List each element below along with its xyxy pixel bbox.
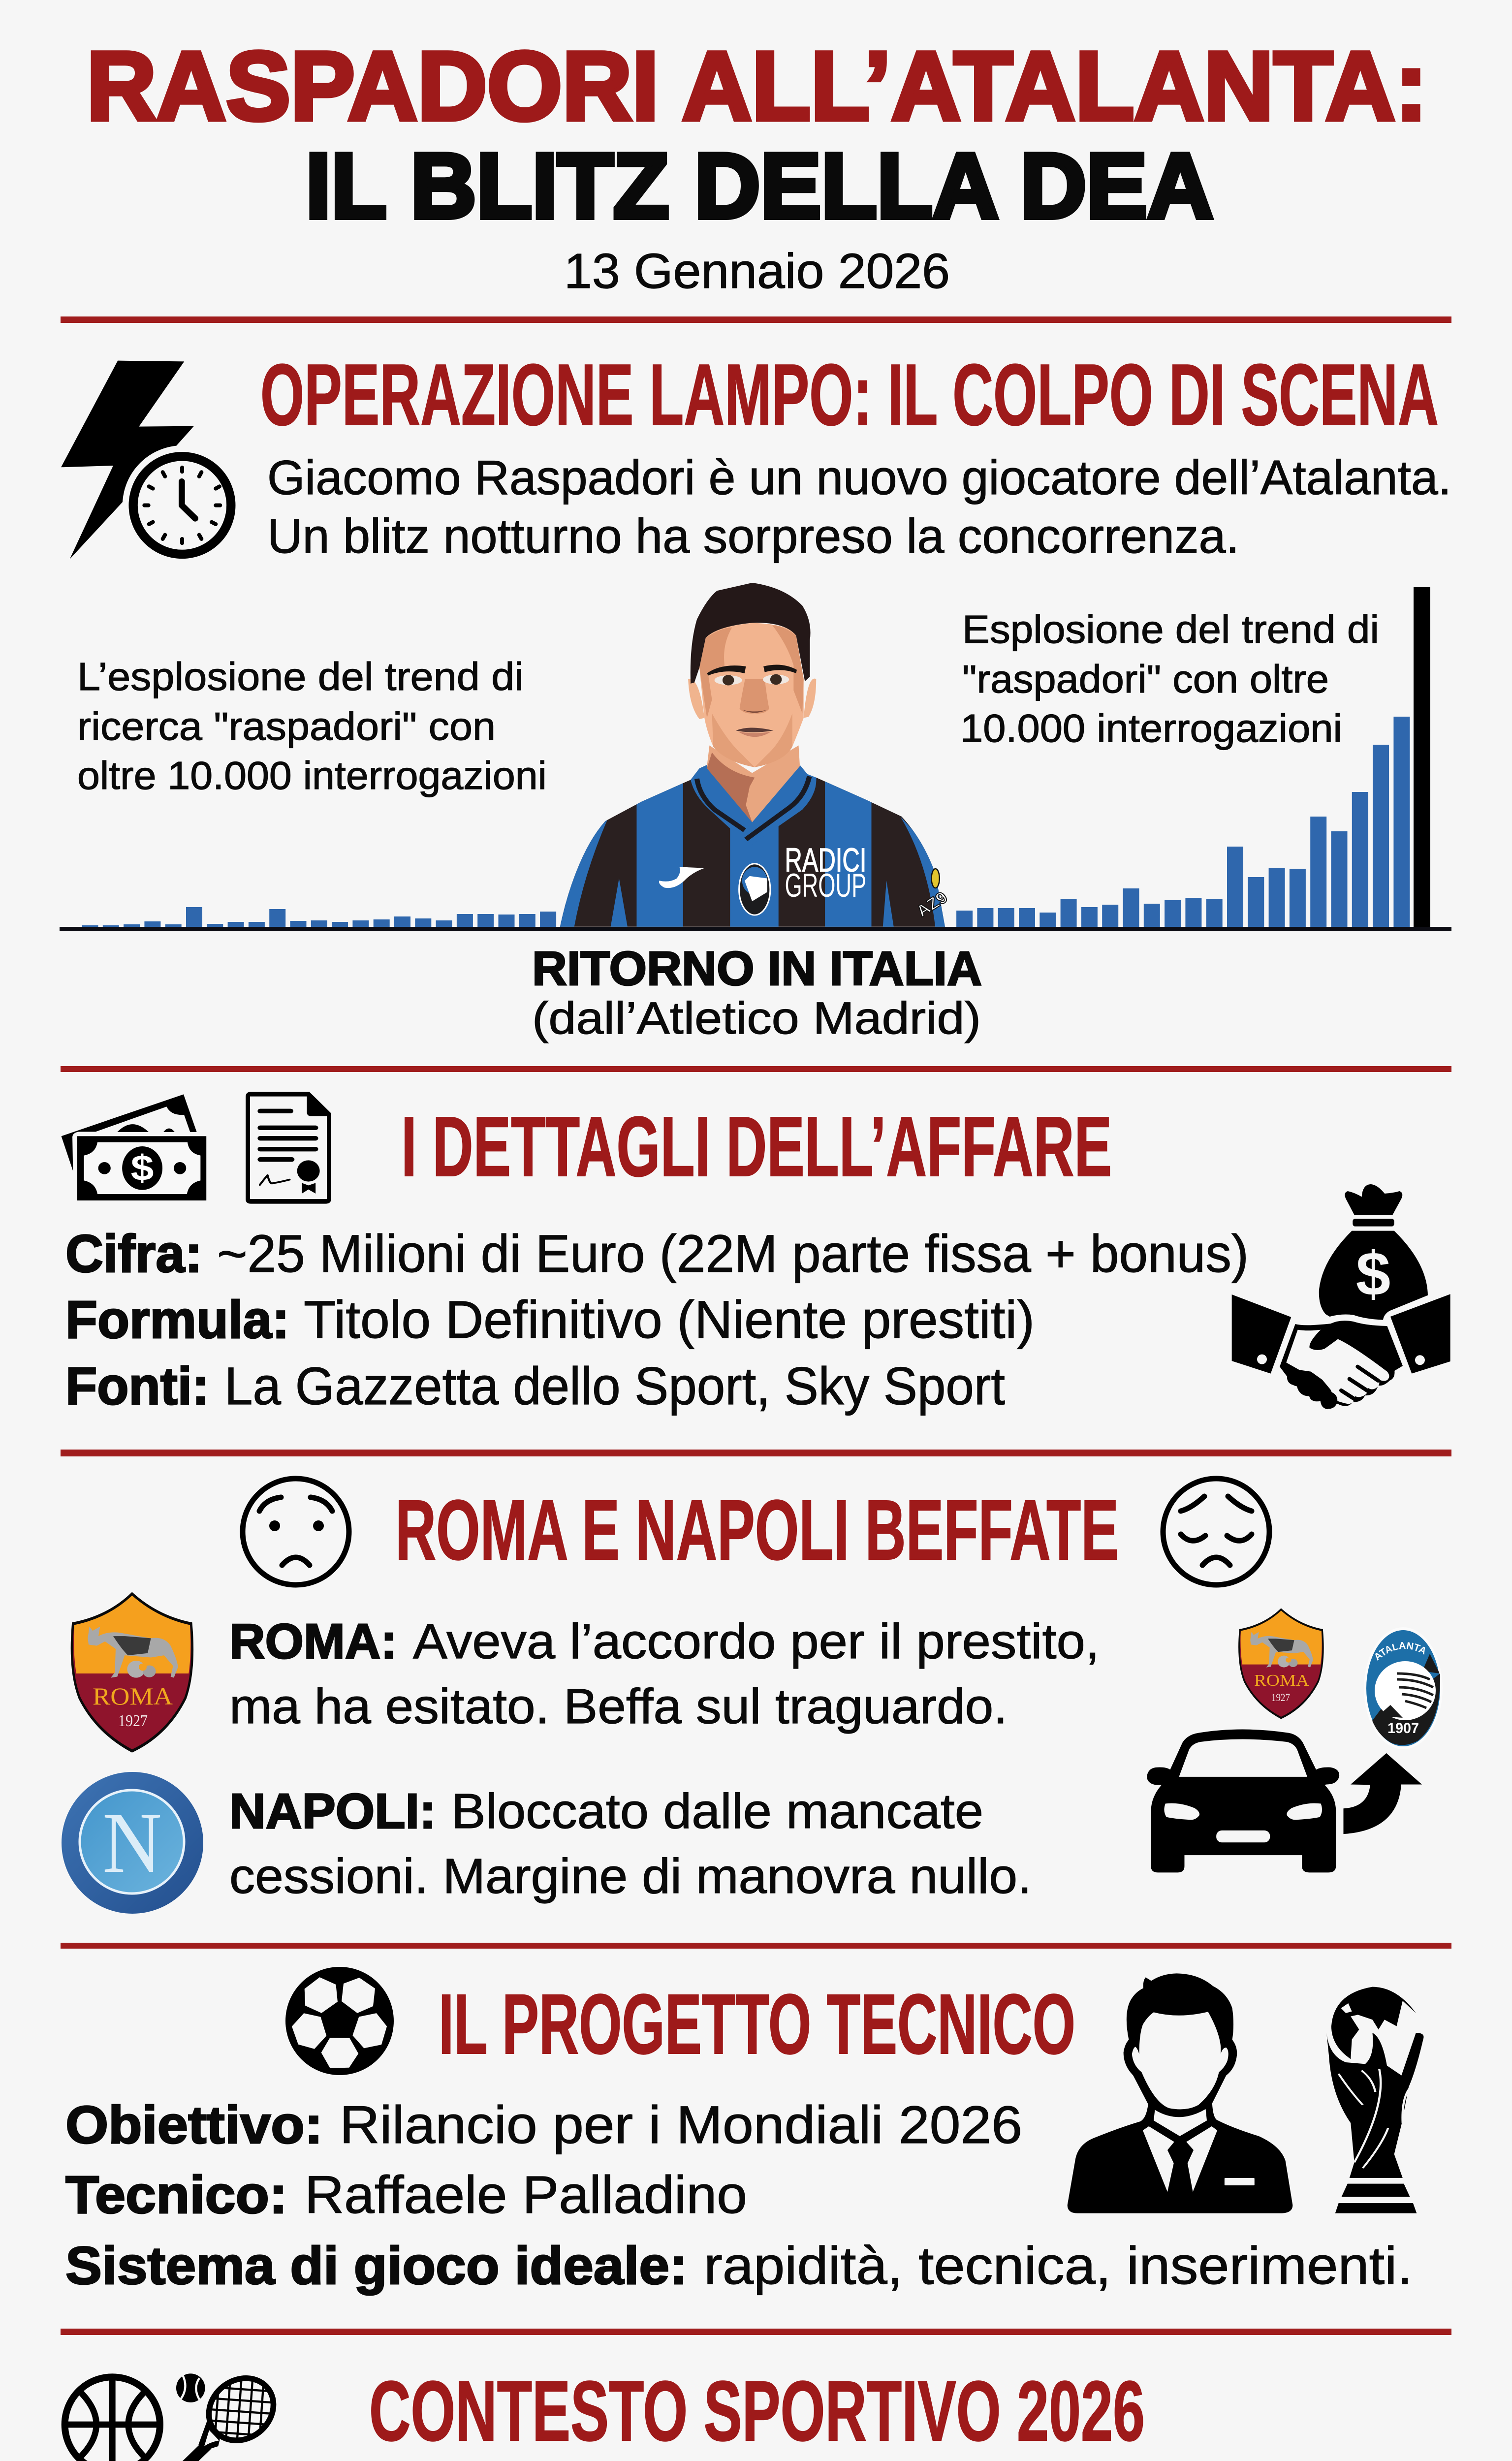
logo: AS Roma shield: ROMA [93, 1682, 173, 1710]
panel: contesto sportivo [62, 2362, 1239, 2461]
icon: sad face [1163, 1479, 1269, 1585]
heading: I DETTAGLI DELL’AFFARE [401, 1099, 1112, 1194]
icon: football [285, 1967, 394, 2077]
date: 13 Gennaio 2026 [564, 244, 950, 299]
Napoli text: NAPOLI: [229, 1784, 436, 1839]
caption left: ricerca "raspadori" con [77, 704, 496, 748]
project facts: rapidità, tecnica, inserimenti. [704, 2236, 1413, 2295]
Napoli text [229, 1784, 1032, 1904]
project facts: Sistema di gioco ideale: [65, 2236, 688, 2295]
heading: IL PROGETTO TECNICO [439, 1976, 1075, 2072]
deal facts: Formula: [65, 1290, 289, 1349]
panel: operazione lampo [61, 346, 1451, 563]
logo: Atalanta badge: 1907 [1387, 1720, 1419, 1736]
heading: ROMA E NAPOLI BEFFATE [395, 1482, 1119, 1578]
icon: tennis racket and ball [176, 2362, 290, 2461]
intro text: Un blitz notturno ha sorpreso la concorrenza. [267, 509, 1239, 563]
caption left: L’esplosione del trend di [77, 655, 524, 698]
return to italy caption: (dall’Atletico Madrid) [532, 993, 981, 1043]
Napoli text: Bloccato dalle mancate [451, 1784, 983, 1839]
heading: CONTESTO SPORTIVO 2026 [369, 2363, 1145, 2459]
caption left: oltre 10.000 interrogazioni [77, 754, 547, 797]
player illustration [551, 583, 953, 929]
project facts: Rilancio per i Mondiali 2026 [340, 2095, 1022, 2154]
icon: coach [1068, 1973, 1292, 2213]
title line 2: IL BLITZ DELLA DEA [306, 134, 1213, 237]
bar chart: search trend right [956, 587, 1430, 928]
project facts: Tecnico: [65, 2165, 287, 2224]
Napoli text: cessioni. Margine di manovra nullo. [229, 1849, 1032, 1904]
logo: AS Roma shield: 1927 [118, 1712, 148, 1730]
Roma text: Aveva l’accordo per il prestito, [413, 1614, 1100, 1669]
caption right: Esplosione del trend di [962, 607, 1379, 651]
return to italy caption: RITORNO IN ITALIA [532, 942, 982, 995]
panel: search trend chart and player [60, 583, 1451, 1043]
project facts [65, 2095, 1413, 2295]
logo: small Roma shield: 1927 [1271, 1691, 1290, 1704]
panel: roma e napoli beffate [62, 1476, 1440, 1914]
icon: car [1147, 1730, 1339, 1872]
logo: small Roma shield [1239, 1609, 1323, 1718]
arrow: car moving to Atalanta [1343, 1753, 1422, 1834]
caption right: "raspadori" con oltre [962, 657, 1329, 701]
intro text: Giacomo Raspadori è un nuovo giocatore dell’Atalanta. [267, 450, 1451, 505]
icon: sports set [62, 2362, 290, 2461]
logo: Napoli badge [62, 1772, 203, 1914]
logo: AS Roma shield [72, 1594, 192, 1751]
logo: Napoli badge: N [102, 1795, 162, 1891]
panel: dettagli affare [62, 1092, 1450, 1416]
bar chart: search trend left [82, 907, 556, 927]
axis [60, 927, 1451, 931]
title block [87, 32, 1427, 299]
logo: small Roma shield: ROMA [1254, 1672, 1309, 1690]
player illustration: AZ9 [913, 888, 951, 920]
icon: basketball [65, 2377, 160, 2461]
icon: contract [246, 1092, 331, 1204]
project facts: Obiettivo: [65, 2095, 323, 2154]
intro text [267, 450, 1451, 563]
return to italy caption [532, 942, 982, 1043]
icon: lightning and clock [61, 361, 231, 559]
caption left [77, 655, 547, 797]
project facts: Raffaele Palladino [305, 2165, 747, 2224]
icon: world cup trophy [1326, 1987, 1424, 2213]
sponsor text [785, 842, 866, 904]
deal facts: Titolo Definitivo (Niente prestiti) [304, 1290, 1035, 1349]
Roma text: ma ha esitato. Beffa sul traguardo. [229, 1679, 1008, 1734]
Roma text [229, 1614, 1100, 1734]
icon: money bag and handshake [1232, 1184, 1450, 1409]
deal facts: Cifra: [65, 1224, 202, 1283]
title line 1: RASPADORI ALL’ATALANTA: [87, 32, 1427, 140]
sponsor text: RADICI [785, 842, 866, 879]
icon: worried face [243, 1479, 349, 1585]
deal facts: La Gazzetta dello Sport, Sky Sport [224, 1356, 1005, 1416]
sponsor text: GROUP [785, 867, 866, 904]
deal facts [65, 1224, 1249, 1416]
deal facts: Fonti: [65, 1356, 209, 1416]
icon: banknotes: $ [131, 1148, 154, 1188]
icon: money bag and handshake: $ [1356, 1239, 1390, 1309]
logo: Atalanta badge: ATALANTA [1375, 1642, 1425, 1661]
panel: progetto tecnico [65, 1967, 1424, 2295]
Roma text: ROMA: [229, 1614, 397, 1669]
caption right [960, 607, 1379, 750]
caption right: 10.000 interrogazioni [960, 706, 1342, 750]
icon: banknotes [62, 1094, 206, 1200]
deal facts: ~25 Milioni di Euro (22M parte fissa + bonus) [217, 1224, 1249, 1283]
logo: Atalanta badge [1366, 1630, 1440, 1746]
